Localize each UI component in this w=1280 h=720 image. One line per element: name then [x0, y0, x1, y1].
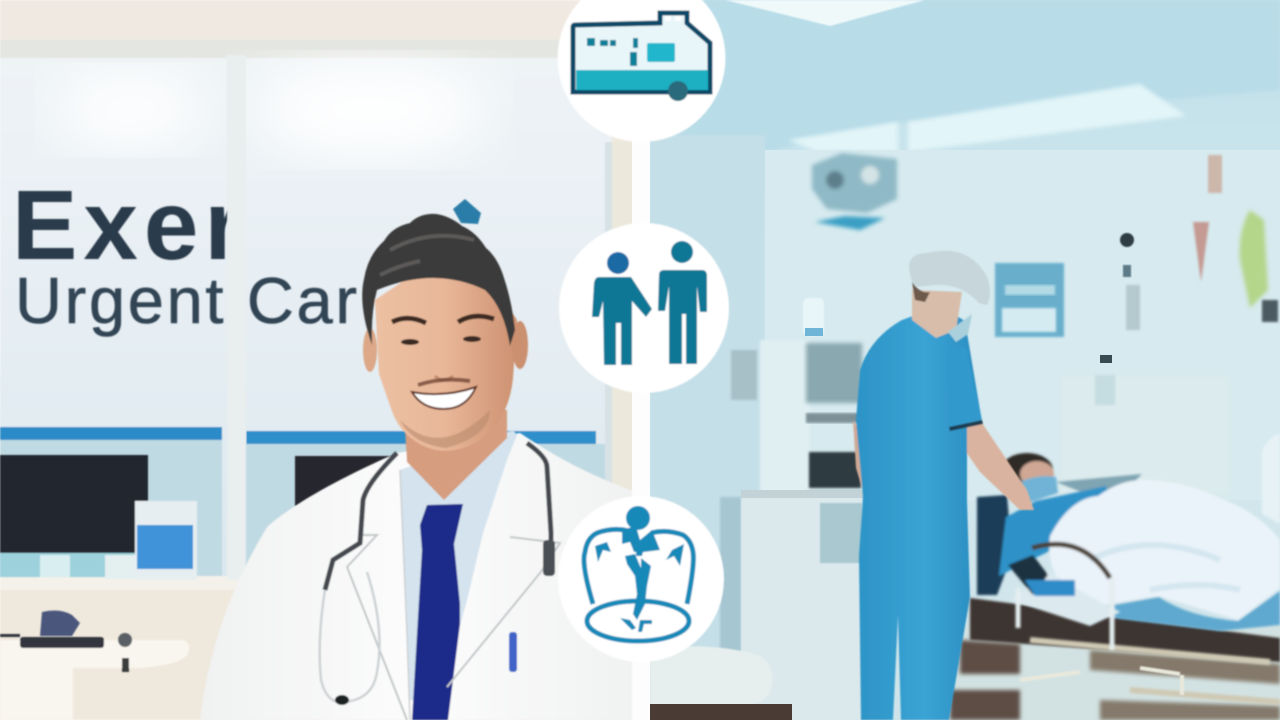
panel: hospital room background [650, 0, 1280, 720]
coat lapels [347, 535, 407, 720]
blue necktie [412, 504, 463, 720]
heading: clinic wall sign [12, 170, 357, 337]
panel: urgent care reception background [0, 0, 650, 720]
window pillar [227, 55, 246, 580]
icon: sign logo [453, 199, 481, 224]
divider strip [632, 140, 650, 720]
heading: clinic wall sign: Exer [12, 170, 249, 280]
stubble [400, 410, 490, 448]
white lab coat [200, 433, 640, 720]
icon: two people badge [559, 223, 729, 393]
hair [362, 214, 515, 346]
stethoscope [325, 453, 397, 590]
pen [509, 632, 517, 672]
patient on hospital bed [977, 453, 1280, 650]
brows and eyes [392, 316, 494, 323]
bed and exam cushion [650, 598, 1280, 720]
icon: ambulance badge [558, 0, 726, 142]
smile and moustache [418, 380, 470, 385]
heading: clinic wall sign: Urgent Car [15, 264, 357, 337]
icon: fountain badge [558, 496, 724, 662]
exam cushion [650, 646, 772, 710]
doctor portrait [200, 214, 642, 720]
reception desk and monitors [0, 455, 405, 720]
ceiling surgical lamp [812, 153, 897, 230]
face [375, 260, 517, 451]
nurse in blue scrubs [853, 251, 1034, 720]
IV stand and bags [1246, 300, 1252, 505]
shirt [400, 430, 517, 700]
neck [404, 410, 507, 500]
